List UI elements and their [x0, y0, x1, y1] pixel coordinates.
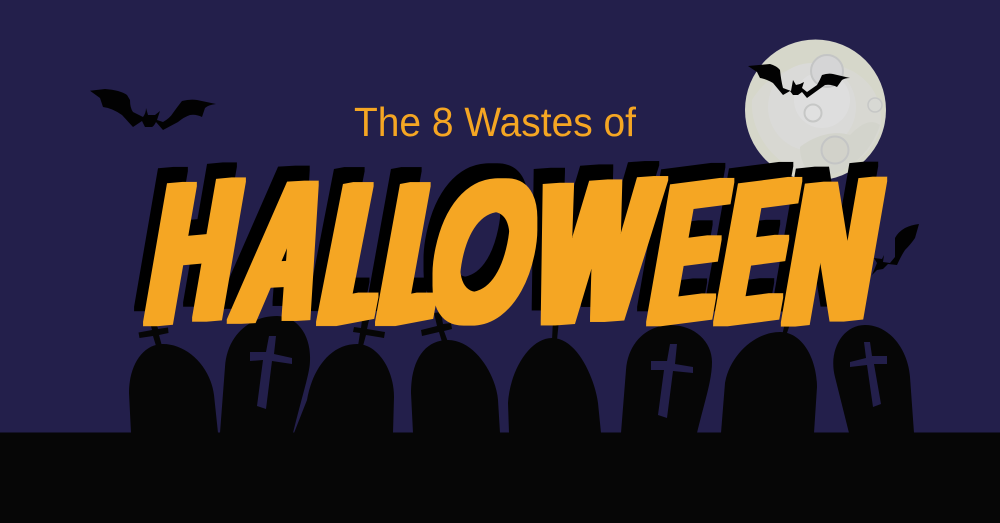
tombstone 5 with top cross: [508, 320, 601, 433]
word HALLOWEEN: black drop shadow: A: [211, 124, 342, 350]
word HALLOWEEN: black drop shadow: L: [363, 120, 449, 353]
icon: bat behind letter N: [872, 224, 919, 275]
word HALLOWEEN: black drop shadow: [126, 119, 887, 354]
tombstone 4 with top cross: [411, 312, 500, 433]
icon: full moon: [745, 40, 886, 180]
cut-out crosses on tombstones: [250, 336, 887, 418]
tombstone 6 with cut-out cross: [621, 325, 712, 433]
icon: bat top left: [90, 89, 216, 130]
word HALLOWEEN: orange lettering: N: [772, 135, 896, 369]
tombstone 1 with top cross: [129, 321, 218, 433]
word HALLOWEEN: black drop shadow: E: [697, 120, 800, 353]
word HALLOWEEN: black drop shadow: L: [304, 119, 393, 353]
word HALLOWEEN: orange lettering: E: [706, 135, 809, 368]
word HALLOWEEN: black drop shadow: W: [510, 120, 660, 353]
word HALLOWEEN: orange lettering: W: [519, 135, 669, 368]
word HALLOWEEN: orange lettering: E: [639, 135, 741, 368]
word HALLOWEEN: black drop shadow: N: [763, 120, 887, 354]
tombstone 2 with cut-out cross: [220, 316, 310, 433]
word HALLOWEEN: orange lettering: A: [220, 139, 351, 365]
word HALLOWEEN: orange lettering: H: [135, 135, 254, 368]
word HALLOWEEN: black drop shadow: H: [126, 120, 245, 353]
tombstone 3 with top cross: [294, 320, 394, 433]
word HALLOWEEN: orange lettering: L: [372, 135, 458, 368]
icon: bat over moon: [748, 64, 850, 98]
tombstone 8 with cut-out cross: [833, 325, 914, 433]
word HALLOWEEN: black drop shadow: E: [630, 120, 732, 353]
graveyard ground and tombstones: [0, 312, 1000, 523]
tombstone 7 with top cross: [721, 318, 817, 433]
title line: The 8 Wastes of: [354, 99, 637, 145]
word HALLOWEEN: black drop shadow: O: [403, 127, 549, 347]
word HALLOWEEN: orange lettering: L: [313, 134, 402, 368]
word HALLOWEEN: orange lettering: O: [412, 142, 558, 362]
word HALLOWEEN: orange lettering: [135, 134, 896, 369]
